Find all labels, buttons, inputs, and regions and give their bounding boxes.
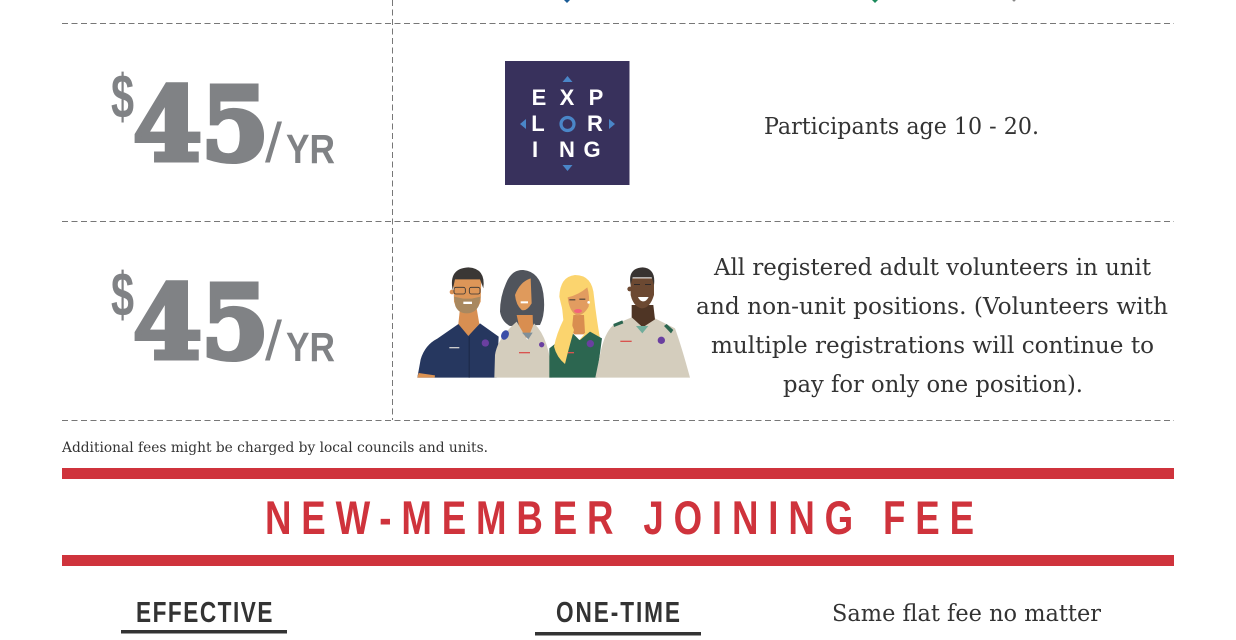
logo: Exploring: X	[560, 85, 575, 110]
price: $45 per year, Exploring row: 4	[133, 65, 202, 184]
logo: Exploring: L	[531, 111, 545, 136]
price: $45 per year, Exploring row: $	[111, 63, 134, 132]
text: adult volunteers eligibility	[696, 253, 1168, 398]
logo: Exploring: N	[559, 137, 575, 162]
logo: Exploring: P	[589, 85, 603, 110]
illustration: four adult volunteers	[417, 267, 690, 378]
logo: Exploring: I	[532, 137, 538, 162]
footnote: Additional fees might be charged by local councils and units.	[61, 440, 488, 456]
heading: one-time	[535, 595, 701, 636]
text: flat fee note: Same flat fee no matter	[832, 599, 1102, 627]
price: $45 per year, Exploring row	[111, 63, 335, 184]
clipped marks from the row above	[564, 0, 1016, 3]
text: adult volunteers eligibility: pay for only one position).	[783, 370, 1083, 398]
person 2: grey hair, tan jacket	[494, 270, 552, 378]
price: $45 per year, Exploring row: YR	[286, 126, 335, 172]
price: $45 per year, Exploring row: 5	[201, 65, 269, 184]
price: $45 per year, adult volunteers row: 4	[133, 263, 202, 382]
price: $45 per year, Exploring row: /	[265, 111, 282, 174]
text: adult volunteers eligibility: All registered adult volunteers in unit	[713, 253, 1152, 281]
logo: Exploring	[505, 61, 630, 185]
text: Exploring eligibility: Participants age 10 - 20.	[764, 112, 1039, 140]
price: $45 per year, adult volunteers row: /	[265, 309, 282, 372]
section banner: new-member joining fee	[62, 468, 1174, 566]
logo: Exploring: R	[587, 111, 603, 136]
section banner: new-member joining fee: NEW-MEMBER JOINING FEE	[265, 492, 974, 544]
text: adult volunteers eligibility: and non-unit positions. (Volunteers with	[696, 292, 1168, 320]
person 4: dark skin, tan jacket	[595, 267, 690, 378]
logo: Exploring: E	[532, 85, 546, 110]
person 1: navy shirt	[417, 267, 499, 378]
price: $45 per year, adult volunteers row: YR	[286, 324, 335, 370]
heading: one-time: ONE-TIME	[556, 595, 680, 629]
price: $45 per year, adult volunteers row	[111, 261, 335, 382]
person 3: blonde hair, green top	[549, 275, 602, 378]
price: $45 per year, adult volunteers row: $	[111, 261, 134, 330]
heading: effective: EFFECTIVE	[136, 595, 272, 629]
price: $45 per year, adult volunteers row: 5	[201, 263, 269, 382]
text: adult volunteers eligibility: multiple registrations will continue to	[711, 331, 1154, 359]
logo: Exploring: G	[583, 137, 601, 162]
